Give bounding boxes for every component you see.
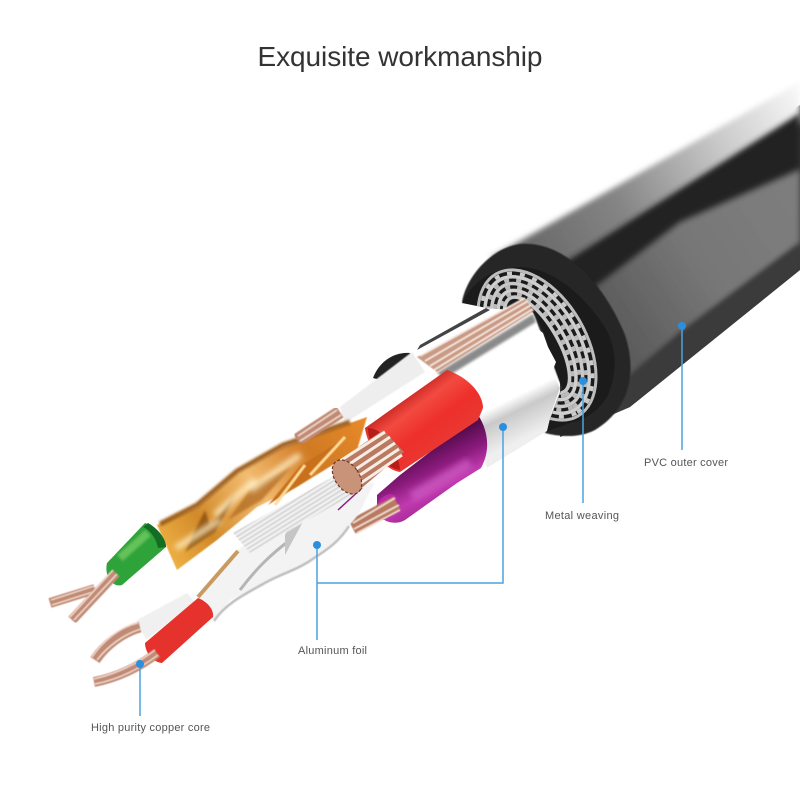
sheath top line xyxy=(417,308,490,350)
callout: high purity copper core xyxy=(91,660,210,734)
silver foil hatch bundle xyxy=(233,473,360,553)
green wire copper strands xyxy=(50,570,117,620)
purple wire copper core xyxy=(352,498,400,533)
lower copper strands xyxy=(92,623,158,684)
upper copper strands xyxy=(417,298,534,372)
small white sheath xyxy=(137,593,195,640)
green insulated wire xyxy=(50,523,166,620)
callout: metal weaving: Metal weaving xyxy=(545,510,619,522)
upper white sheath xyxy=(340,352,425,423)
metal weaving xyxy=(462,267,614,432)
callout: aluminum foil: Aluminum foil xyxy=(298,645,367,657)
foil tube shadow xyxy=(437,314,536,378)
copper strand above gold foil xyxy=(297,410,341,441)
red insulated wire xyxy=(365,370,483,472)
callout: aluminum foil xyxy=(298,423,507,657)
callout: PVC outer cover xyxy=(644,322,728,469)
aluminum foil tube xyxy=(440,323,560,468)
silver foil pair xyxy=(197,482,375,621)
title: Exquisite workmanship xyxy=(258,41,542,72)
gold foil twisted pair xyxy=(157,417,367,570)
central copper bundle xyxy=(326,430,404,499)
cable end ring xyxy=(462,244,631,436)
purple insulated wire xyxy=(352,415,487,533)
callout: metal weaving xyxy=(545,377,619,522)
callout: high purity copper core: High purity copper core xyxy=(91,722,210,734)
cable illustration xyxy=(50,82,800,684)
dark gap behind sheath xyxy=(373,353,415,380)
small red insulated wire xyxy=(145,598,213,663)
callout: PVC outer cover: PVC outer cover xyxy=(644,457,728,469)
PVC outer cover xyxy=(490,82,800,437)
